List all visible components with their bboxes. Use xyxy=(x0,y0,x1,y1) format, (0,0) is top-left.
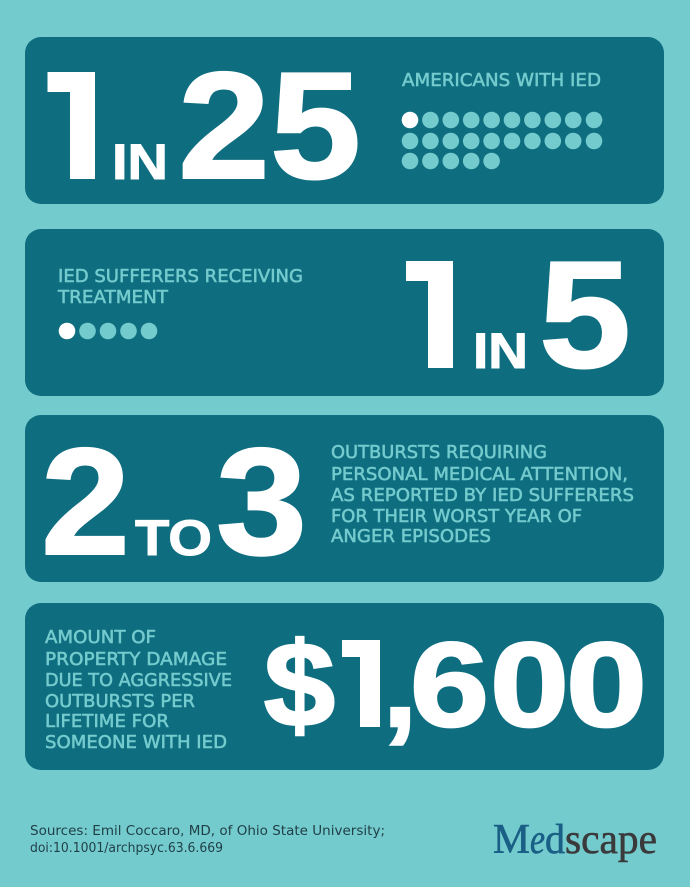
label: outbursts requiring medical attention: OUTBURSTS REQUIRING xyxy=(331,443,547,463)
label: amount of property damage: PROPERTY DAMAGE xyxy=(45,650,227,670)
stat: 2 to 3: TO xyxy=(135,510,212,566)
label: IED sufferers receiving treatment: TREATMENT xyxy=(57,288,168,308)
stat: $1,600: , xyxy=(383,618,417,752)
stat: 1 in 5: 5 xyxy=(539,230,631,400)
label: IED sufferers receiving treatment xyxy=(57,267,303,308)
sources: doi:10.1001/archpsyc.63.6.669 xyxy=(30,841,223,856)
label: outbursts requiring medical attention: AS REPORTED BY IED SUFFERERS xyxy=(331,486,634,506)
label: outbursts requiring medical attention xyxy=(331,443,634,547)
label: outbursts requiring medical attention: PERSONAL MEDICAL ATTENTION, xyxy=(331,465,628,485)
stat: 1 in 5: IN xyxy=(473,323,528,379)
stat: 2 to 3 xyxy=(41,417,307,587)
stat: $1,600: 1 xyxy=(355,640,391,739)
dot row: 1 in 5 xyxy=(59,323,157,339)
stat: 1 in 5 xyxy=(406,230,631,400)
stat: $1,600 xyxy=(264,618,647,752)
label: outbursts requiring medical attention: ANGER EPISODES xyxy=(331,527,491,547)
stat: $1,600: 6 xyxy=(410,618,489,752)
stat: 1 in 25: 1 xyxy=(64,69,108,194)
panel: 2 to 3 xyxy=(25,415,664,587)
logo: Medscape xyxy=(493,817,657,863)
label: amount of property damage: SOMEONE WITH IED xyxy=(45,733,227,753)
logo: Medscape: e xyxy=(530,817,545,863)
stat: $1,600: 0 xyxy=(566,618,647,752)
label: amount of property damage: OUTBURSTS PER xyxy=(45,692,195,712)
logo: Medscape: scape xyxy=(565,817,657,863)
stat: 1 in 25: IN xyxy=(112,134,168,190)
dot grid: 1 in 25 xyxy=(402,112,602,169)
stat: 1 in 25: 5 xyxy=(270,41,361,211)
logo: Medscape: d xyxy=(545,817,565,863)
logo: Medscape: M xyxy=(493,817,530,863)
sources xyxy=(30,824,385,856)
stat: $1,600: $ xyxy=(264,618,335,752)
stat: $1,600: 0 xyxy=(490,618,569,752)
label: amount of property damage: AMOUNT OF xyxy=(45,628,156,648)
label: Americans with IED: AMERICANS WITH IED xyxy=(402,71,601,91)
panel: 1 in 5 xyxy=(25,229,664,400)
stat: 1 in 5: 1 xyxy=(422,258,466,383)
stat: 1 in 25: 2 xyxy=(178,41,270,211)
label: amount of property damage: LIFETIME FOR xyxy=(45,712,169,732)
sources: Sources: Emil Coccaro, MD, of Ohio State University; xyxy=(30,824,385,839)
label: amount of property damage: DUE TO AGGRESSIVE xyxy=(45,671,232,691)
panel: 1 in 25 xyxy=(25,37,664,211)
stat: 1 in 25 xyxy=(48,41,361,211)
label: amount of property damage xyxy=(45,628,232,753)
stat: 2 to 3: 3 xyxy=(216,417,307,587)
stat: 2 to 3: 2 xyxy=(41,417,130,587)
label: IED sufferers receiving treatment: IED SUFFERERS RECEIVING xyxy=(58,267,303,287)
panel: $1,600 xyxy=(25,603,664,770)
label: outbursts requiring medical attention: FOR THEIR WORST YEAR OF xyxy=(331,507,582,527)
